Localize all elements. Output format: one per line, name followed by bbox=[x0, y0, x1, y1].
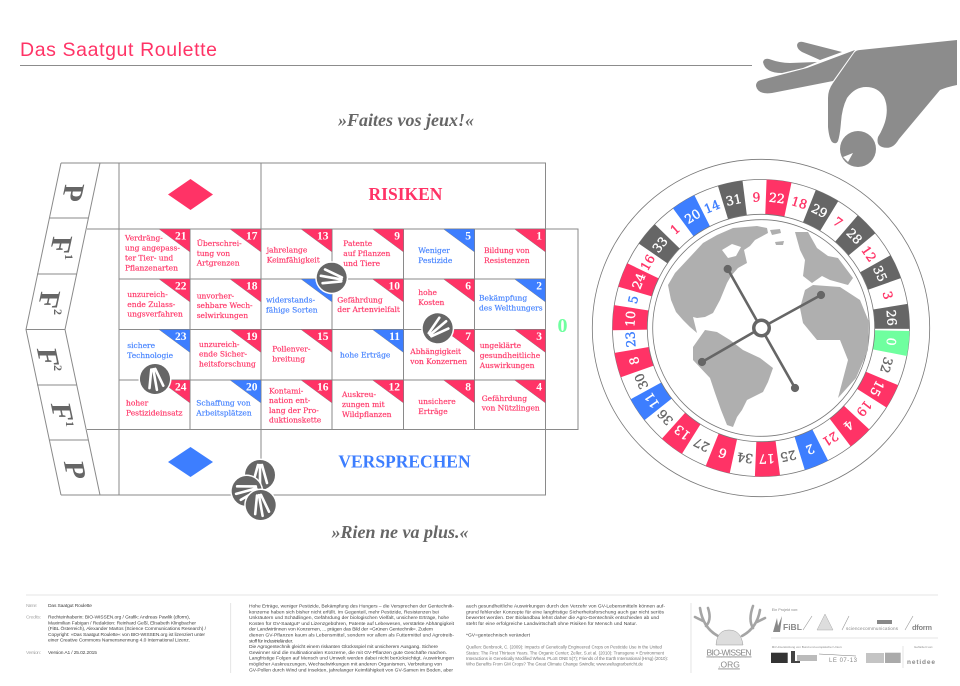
cell 11 bbox=[340, 330, 404, 359]
cell 1: Resistenzen bbox=[484, 256, 530, 265]
number ring: 11 bbox=[641, 390, 662, 411]
cell 2: Bekämpfung bbox=[479, 293, 527, 302]
side labels P F1 F2: 2 bbox=[51, 365, 65, 371]
partner logos: ein projekt von: sciencecommunications bbox=[846, 626, 899, 631]
sponsor logos: Mit Unterstützung von Bund und europäischer Union: bbox=[772, 645, 842, 649]
cell 8 bbox=[418, 380, 474, 416]
footer: body text column one: konzerne haben sich bisher nicht erfüllt. Im Gegenteil, mehr Pestizide, Resistenzen bei bbox=[249, 609, 439, 615]
number ring: 28 bbox=[844, 225, 865, 247]
number ring: 15 bbox=[867, 378, 888, 399]
heading: faites vos jeux: »Faites vos jeux!« bbox=[337, 110, 474, 130]
footer: body text column one bbox=[249, 604, 455, 673]
number ring: 27 bbox=[691, 434, 712, 455]
cell 8: 8 bbox=[465, 382, 471, 394]
cell 13: jahrelange bbox=[266, 246, 308, 255]
footer: credits: einer Creative Commons Namensnennung 4.0 International Lizenz. bbox=[48, 638, 190, 644]
number ring: 29 bbox=[809, 201, 830, 221]
number ring: 22 bbox=[768, 190, 786, 206]
number ring: 30 bbox=[631, 371, 651, 392]
heading: rien ne va plus: »Rien ne va plus.« bbox=[330, 522, 469, 542]
cell 22: unzureich- bbox=[127, 290, 168, 299]
cell 11: 11 bbox=[389, 331, 400, 343]
roulette board grid bbox=[26, 163, 578, 495]
cell 24: hoher bbox=[126, 399, 149, 408]
cell 22: ungsverfahren bbox=[127, 310, 183, 319]
cell 10: der Artenvielfalt bbox=[337, 305, 400, 314]
side labels P F1 F2: F bbox=[31, 291, 66, 309]
roulette wheel bbox=[592, 159, 930, 497]
cell 9: 9 bbox=[394, 230, 400, 242]
cell 2: 2 bbox=[536, 280, 542, 292]
number ring: 0 bbox=[883, 337, 899, 346]
cell 7: von Konzernen bbox=[409, 357, 467, 366]
side labels P F1 F2: 2 bbox=[51, 309, 65, 315]
footer: body text column one: dienen GV-Pflanzen kaum als Lebensmittel, sondern vor allem als Futtermittel und Agrotreib- bbox=[249, 632, 454, 638]
footer: credits: (FiBL Österreich), Alexander Martos (Science Communications Research) / bbox=[48, 625, 207, 632]
cell 21: ung angepass- bbox=[125, 244, 180, 252]
cell 9 bbox=[343, 229, 404, 268]
footer: body text column two and sources: auch gesundheitliche Auswirkungen durch den Verzehr von GV-Lebensmitteln können auf- bbox=[466, 604, 665, 610]
number ring: 4 bbox=[841, 417, 857, 434]
cell 2: des Welthungers bbox=[479, 303, 543, 312]
cell 5: Weniger bbox=[418, 246, 450, 255]
cell 20: Arbeitsplätzen bbox=[195, 408, 252, 417]
cell 19: heitsforschung bbox=[199, 359, 256, 368]
partner logos: ein projekt von: Ein Projekt von: bbox=[772, 608, 798, 612]
footer: body text column two and sources: Quellen: Benbrook, C. (2009): Impacts of Genetically Engineered Crops on Pesticide Use in the United bbox=[466, 644, 663, 650]
number ring: 12 bbox=[858, 243, 880, 265]
footer: credits bbox=[26, 603, 207, 656]
sponsor logos bbox=[771, 645, 935, 668]
cell 5 bbox=[418, 229, 474, 265]
cell 6: Kosten bbox=[418, 298, 445, 307]
cell 6 bbox=[418, 279, 474, 307]
footer: body text column one: möglicher Auskreuzungen, Wechselwirkungen mit anderen Organismen, Verbreitung von bbox=[249, 662, 442, 668]
cell 19: ende Sicher- bbox=[199, 350, 247, 359]
cell 4: 4 bbox=[536, 382, 542, 394]
chip on board bbox=[136, 360, 174, 398]
cell 17: Überschrei- bbox=[197, 239, 242, 248]
cell 23: 23 bbox=[175, 331, 187, 343]
cell 12: Auskreu- bbox=[341, 390, 376, 399]
cell 9: und Tiere bbox=[343, 259, 381, 268]
number ring bbox=[612, 179, 910, 477]
cell 5: Pestizide bbox=[418, 256, 453, 265]
cell 16: duktionskette bbox=[269, 416, 322, 425]
cell 23: Technologie bbox=[127, 351, 174, 360]
cell 19: unzureich- bbox=[199, 340, 240, 349]
cell 9: Patente bbox=[343, 239, 373, 248]
cell 10: 10 bbox=[388, 280, 400, 292]
cell 11: hohe Erträge bbox=[340, 350, 391, 359]
number ring: 16 bbox=[637, 252, 658, 273]
number ring: 31 bbox=[724, 191, 743, 209]
cell 23: sichere bbox=[127, 341, 156, 350]
cell 12: Wildpflanzen bbox=[342, 410, 392, 419]
partner logos: ein projekt von: dform bbox=[912, 623, 932, 632]
side labels P F1 F2: P bbox=[57, 461, 92, 479]
footer divider bbox=[26, 594, 938, 596]
cell 12: 12 bbox=[388, 382, 400, 394]
footer: body text column one: der LandwirtInnen von Konzernen, ... prägen das Bild der »Grünen Gentechnik«. Zudem bbox=[249, 627, 433, 633]
cell 16 bbox=[269, 380, 332, 425]
side labels P F1 F2: F bbox=[30, 348, 65, 366]
number ring: 34 bbox=[736, 450, 754, 466]
cell 3: gesundheitliche bbox=[480, 351, 541, 360]
footer: body text column one: Gewinner sind die multinationalen Konzerne, die mit GV-Pflanzen gute Geschäfte machen. bbox=[249, 650, 447, 656]
number ring: 36 bbox=[654, 406, 676, 428]
cell 14 bbox=[266, 279, 332, 315]
number ring: 3 bbox=[880, 289, 896, 301]
cell 1 bbox=[484, 229, 546, 265]
cell 18: 18 bbox=[246, 280, 258, 292]
cell 7: 7 bbox=[465, 331, 471, 343]
number ring: 17 bbox=[758, 451, 775, 467]
footer: credits: Maximilian Fabigan / Redaktion: Reinhard Geßl, Elisabeth Klingbacher bbox=[48, 620, 196, 626]
number ring: 20 bbox=[682, 206, 703, 227]
cell 20 bbox=[195, 380, 261, 417]
cell 1: Bildung von bbox=[484, 246, 530, 255]
cell 15: Pollenver- bbox=[272, 345, 311, 354]
footer: credits: Version A1 / 25.02.2015 bbox=[48, 650, 97, 656]
logo: bio-wissen: BIO-WISSEN bbox=[706, 648, 752, 658]
cell 16: lang der Pro- bbox=[269, 406, 319, 415]
zero label: 0 bbox=[558, 315, 568, 337]
cell 16: 16 bbox=[317, 382, 329, 394]
cell 3: 3 bbox=[536, 331, 542, 343]
cell 21: Pflanzenarten bbox=[125, 264, 178, 272]
cell 19: 19 bbox=[246, 331, 258, 343]
number ring: 32 bbox=[877, 355, 896, 375]
cell 22 bbox=[127, 279, 190, 319]
cell 1: 1 bbox=[536, 230, 542, 242]
sponsor logos: Gefördert von: bbox=[914, 645, 933, 649]
number ring: 26 bbox=[883, 309, 900, 326]
icon: hand dropping chip bbox=[756, 40, 957, 167]
globe continents bbox=[668, 226, 869, 427]
footer: body text column one: Langfristige Folgen auf Mensch und Umwelt werden dabei nicht berücksichtigt. Auswirkungen bbox=[249, 656, 454, 662]
number ring: 6 bbox=[717, 445, 729, 462]
cell 3: Auswirkungen bbox=[479, 361, 535, 370]
cell 23 bbox=[127, 330, 190, 360]
number ring: 23 bbox=[622, 331, 639, 348]
cell 5: 5 bbox=[465, 230, 471, 242]
cell 3 bbox=[479, 330, 546, 370]
cell 22: 22 bbox=[175, 280, 187, 292]
cell 10 bbox=[337, 279, 404, 314]
footer: body text column two and sources: steht für eine erfolgreiche Landwirtschaft ohne Risiken für Mensch und Natur. bbox=[466, 621, 637, 627]
cell 3: ungeklärte bbox=[480, 341, 522, 350]
cell 18: unvorher- bbox=[197, 292, 235, 301]
number ring: 5 bbox=[625, 294, 641, 305]
footer: body text column two and sources: Interactions in Genetically Modified Wheat. PLoS ONE 5(7); Friends of the Earth International (Hrsg) (2010): bbox=[466, 656, 668, 661]
number ring: 1 bbox=[667, 221, 683, 237]
logo: bio-wissen: .ORG bbox=[718, 660, 740, 670]
cell 15 bbox=[272, 330, 332, 363]
cell 22: ende Zulass- bbox=[127, 300, 176, 309]
cell 6: 6 bbox=[465, 280, 471, 292]
cell 18: sehbare Wech- bbox=[197, 301, 253, 310]
footer: body text column one: Hohe Erträge, weniger Pestizide, Bekämpfung des Hungers – die Versprechen der Gentechnik- bbox=[249, 604, 454, 610]
number ring: 10 bbox=[622, 310, 638, 327]
heading: risiken: RISIKEN bbox=[369, 184, 443, 204]
cell 14: fähige Sorten bbox=[266, 306, 318, 315]
logo: bio-wissen bbox=[695, 606, 765, 670]
footer: body text column two and sources: States: The First Thirteen Years. The Organic Center; Zeller, S.et al. (2010): Transgene × Environment bbox=[466, 650, 665, 655]
cell 4: Gefährdung bbox=[482, 394, 527, 403]
footer: body text column one: stoff für Industrieländer. bbox=[249, 638, 293, 644]
cell 21: Verdräng- bbox=[124, 234, 163, 242]
cell 20: 20 bbox=[246, 382, 258, 394]
cell 12 bbox=[341, 380, 404, 419]
cell 4: von Nützlingen bbox=[481, 404, 540, 413]
roulette spokes bbox=[698, 265, 825, 392]
cell 15: 15 bbox=[317, 331, 329, 343]
number ring: 14 bbox=[702, 197, 722, 216]
cell 2 bbox=[479, 279, 546, 312]
number ring: 21 bbox=[820, 429, 841, 450]
cell 24 bbox=[126, 380, 190, 417]
partner logos: ein projekt von bbox=[772, 608, 932, 632]
cell 24: Pestizideinsatz bbox=[126, 408, 183, 417]
number ring: 2 bbox=[804, 441, 817, 458]
footer: body text column two and sources: Who Benefits From GM Crops? The Great Climate Change Swindle; www.weltagrarbericht.de bbox=[466, 662, 644, 667]
cell 17 bbox=[196, 229, 261, 268]
footer: credits: Version: bbox=[26, 650, 41, 656]
chip on board bbox=[313, 259, 351, 297]
cell 7 bbox=[409, 330, 474, 366]
cell 7: Abhängigkeit bbox=[409, 347, 461, 356]
footer: credits: Das Saatgut Roulette bbox=[48, 603, 92, 609]
footer: credits: Rechteinhaberin: BIO-WISSEN.org / Grafik: Andreas Pawlik (dform), bbox=[48, 614, 190, 620]
chip on board bbox=[414, 305, 461, 352]
number ring: 19 bbox=[853, 398, 875, 420]
number ring: 9 bbox=[752, 189, 761, 205]
footer: body text column one: GV-Pollen durch Wind und Insekten, jahrelanger Keimfähigkeit von GV-Samen im Boden, aber bbox=[249, 667, 453, 673]
cell 16: Kontami- bbox=[269, 386, 304, 395]
footer: credits: Credits: bbox=[26, 614, 41, 620]
footer: body text column one: Kosten für GV-Saatgut* und Lizenzgebühren, Patente auf Lebewesen, verstärkte Abhängigkeit bbox=[249, 621, 455, 627]
cell 21: ter Tier- und bbox=[125, 254, 173, 262]
side labels P F1 F2: 1 bbox=[63, 421, 77, 427]
sponsor logos: netidee bbox=[907, 659, 935, 666]
cell 16: nation ent- bbox=[269, 396, 311, 405]
cell 8: unsichere bbox=[418, 397, 456, 406]
partner logos: ein projekt von: FiBL bbox=[783, 622, 802, 632]
cell 21 bbox=[124, 229, 190, 272]
cell 24: 24 bbox=[175, 382, 187, 394]
cell 13: 13 bbox=[317, 230, 329, 242]
number ring: 33 bbox=[649, 234, 671, 256]
cell 12: zungen mit bbox=[342, 400, 385, 409]
footer: body text column two and sources bbox=[466, 604, 668, 667]
cell 4 bbox=[481, 380, 546, 413]
blue diamond bbox=[168, 447, 213, 477]
number ring: 13 bbox=[671, 422, 693, 443]
cell 6: hohe bbox=[418, 288, 437, 297]
cell 9: auf Pflanzen bbox=[343, 249, 391, 258]
number ring: 18 bbox=[790, 193, 809, 212]
red diamond bbox=[168, 179, 213, 210]
side labels P F1 F2 bbox=[30, 184, 92, 479]
number ring: 7 bbox=[830, 214, 846, 230]
side labels P F1 F2: P bbox=[55, 184, 90, 202]
footer: body text column two and sources: grund fehlender Konzepte für eine langfristige Sicherheitsforschung auch gar nicht seriös bbox=[466, 609, 665, 615]
footer: credits: Copyright: »Das Saatgut Roulette« von BIO-WISSEN.org ist lizenziert unter bbox=[48, 632, 205, 638]
cell 13: Keimfähigkeit bbox=[267, 255, 320, 264]
heading: versprechen: VERSPRECHEN bbox=[338, 452, 471, 472]
cell 21: 21 bbox=[175, 230, 187, 242]
number ring: 25 bbox=[779, 447, 798, 465]
cell 18 bbox=[197, 279, 261, 320]
footer: body text column one: Die Agrogentechnik gleicht einem riskanten Glücksspiel mit unsicherem Ausgang. Sichere bbox=[249, 644, 438, 650]
sponsor logos: LE 07-13 bbox=[829, 658, 858, 664]
cell 20: Schaffung von bbox=[196, 399, 251, 408]
title: Das Saatgut Roulette bbox=[20, 39, 217, 61]
number ring: 24 bbox=[629, 271, 649, 291]
cell 8: Erträge bbox=[418, 407, 448, 416]
footer: credits: Name: bbox=[26, 603, 37, 609]
cell 17: Artgrenzen bbox=[196, 258, 240, 268]
side labels P F1 F2: F bbox=[43, 236, 78, 254]
cell 15: breitung bbox=[272, 354, 305, 363]
number ring: 8 bbox=[626, 355, 642, 367]
cell 18: selwirkungen bbox=[197, 311, 248, 320]
cell 13 bbox=[266, 229, 332, 264]
number ring: 35 bbox=[870, 263, 890, 284]
footer: body text column two and sources: bewertet werden. Der Biolandbau lehnt daher die Agro-Gentechnik entschieden ab und bbox=[466, 615, 659, 621]
side labels P F1 F2: 1 bbox=[62, 254, 76, 260]
side labels P F1 F2: F bbox=[44, 403, 79, 421]
cell 17: 17 bbox=[246, 230, 258, 242]
footer: body text column two and sources: *GV=gentechnisch verändert bbox=[466, 632, 531, 638]
cell 14: widerstands- bbox=[266, 296, 315, 305]
chip stack bbox=[226, 458, 280, 524]
cell 10: Gefährdung bbox=[337, 295, 383, 304]
cell 19 bbox=[199, 330, 261, 368]
footer: body text column one: Unkräutern und Schädlingen, Gefährdung der biologischen Vielfalt, unsichere Erträge, hohe bbox=[249, 615, 449, 621]
cell 17: tung von bbox=[197, 249, 230, 258]
